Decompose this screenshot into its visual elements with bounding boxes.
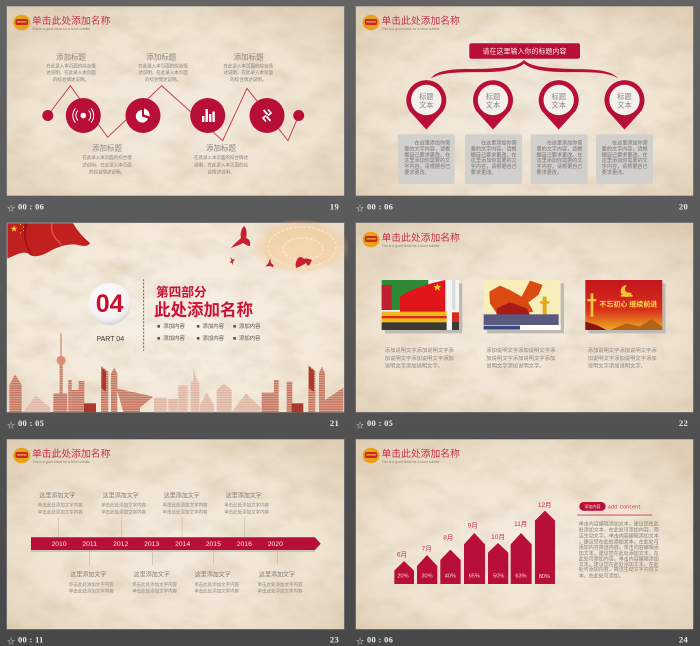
- card 1: 据自己要求更改。在: [404, 151, 450, 158]
- footer 21: 21: [330, 418, 339, 428]
- footer 20: 20: [679, 202, 688, 212]
- brace swoosh: [431, 60, 618, 78]
- paragraph: 单击内容编辑添加文本，建议您在此: [579, 521, 659, 528]
- timeline arrow: 2014: [175, 541, 190, 548]
- end dots: [42, 110, 304, 121]
- house bar chart: 50%: [493, 573, 504, 579]
- footer 20: ☆: [356, 204, 364, 213]
- paragraph: 处可添加内容，简洁生动文字内容文: [579, 566, 659, 573]
- header: 单击此处添加名称: [382, 14, 460, 27]
- caption 1: 加说明文字添加说明文字添加: [385, 354, 454, 362]
- icon: bars: [190, 98, 225, 133]
- label 8: 这里添加文字: [259, 570, 295, 578]
- caption 2: [486, 346, 556, 370]
- label 2: 这里添加文字: [103, 492, 139, 500]
- slide 22: three images: [356, 222, 694, 412]
- card 1: 要求更改。: [404, 169, 430, 176]
- timeline arrow: 2013: [144, 541, 159, 548]
- footer 19: 00 : 06: [18, 202, 44, 212]
- house bar chart: 65%: [469, 573, 480, 579]
- house bar chart: 8月: [443, 534, 453, 542]
- card 1: 在这里添加你需: [414, 140, 450, 146]
- footer 21: 00 : 05: [18, 418, 44, 428]
- header: 单击此处添加名称: [32, 447, 111, 460]
- card 2: [465, 134, 522, 184]
- pin 3: 标题: [552, 92, 566, 101]
- icon: pie: [126, 98, 160, 133]
- label 7: 单击此处添加文字内容: [194, 581, 240, 588]
- paper background: [7, 440, 344, 629]
- caption 3: 加说明文字添加说明文字添加: [588, 354, 657, 362]
- header: This is a good ideas for a short subtitle: [382, 460, 440, 464]
- card 3: [531, 134, 588, 184]
- pin 1: 标题: [419, 92, 433, 101]
- header: [362, 447, 460, 464]
- header: This is a good ideas for a short subtitle: [382, 244, 440, 248]
- icon: link: [250, 98, 284, 133]
- add content pill: Add Content: [608, 504, 641, 510]
- text block 5: 添加标题: [234, 52, 264, 62]
- image: map of china: [484, 280, 564, 333]
- card 2: 这里添加你需要的文: [471, 157, 517, 164]
- text block 3: 的综合情述说明。: [145, 76, 181, 83]
- text block 2: 在此录入本页面的综合情: [82, 154, 132, 161]
- card 3: 要求更改。: [536, 169, 562, 176]
- paragraph: 本，在此处可添加。: [579, 572, 624, 580]
- badge: 04: [88, 283, 131, 325]
- text block 2: 的综合情述说明。: [89, 168, 125, 175]
- label 3: [162, 492, 208, 515]
- label 2: 单击此处添加文字内容: [101, 508, 147, 515]
- bullet list: 添加内容: [202, 334, 225, 342]
- label 1: 单击此处添加文字内容: [38, 508, 83, 515]
- pin 3: 文本: [552, 101, 566, 110]
- paragraph: 文本，建议您在此处添加文本，在此: [579, 561, 659, 568]
- text block 4: 在此录入本页面的综合情述: [194, 154, 248, 161]
- paragraph: 添加内容简洁内容。单击内容编辑添: [579, 544, 659, 551]
- pin 4: 标题: [617, 92, 632, 101]
- text block 5: [224, 52, 274, 83]
- house bar chart: [394, 501, 555, 584]
- header: [13, 447, 111, 464]
- bullet list: [157, 322, 261, 342]
- header: [13, 14, 111, 31]
- pin 3: [539, 80, 579, 130]
- footer 22: 00 : 05: [367, 418, 393, 428]
- text block 2: 述说明，在此录入本页面: [82, 161, 132, 168]
- label 8: 单击此处添加文字内容: [258, 581, 303, 588]
- caption 1: 添加说明文字添加说明文字添: [385, 346, 454, 354]
- label 6: [132, 570, 178, 595]
- label 8: [258, 570, 303, 595]
- label 5: 单击此处添加文字内容: [69, 588, 114, 595]
- timeline arrow: 2015: [206, 541, 221, 548]
- card 3: 字内容，请根据自己: [536, 163, 582, 170]
- label 7: [194, 570, 240, 595]
- text block 3: 述说明，在此录入本页面: [138, 69, 188, 76]
- paragraph: 洁生动文字。单击内容编辑添加文本: [579, 532, 659, 540]
- part label: PART 04: [96, 336, 124, 343]
- label 4: 单击此处添加文字内容: [224, 502, 270, 509]
- bullet list: ■: [196, 336, 200, 342]
- add content pill: [579, 502, 641, 511]
- card 3: 据自己要求更改。在: [536, 151, 582, 158]
- footer 24: [356, 635, 688, 646]
- card 4: 字内容，请根据自己: [602, 163, 648, 170]
- house bar chart: 40%: [445, 573, 456, 579]
- footer 23: ☆: [7, 637, 15, 646]
- house bar chart: 10月: [491, 533, 505, 541]
- card 1: 这里添加你需要的文: [404, 157, 450, 164]
- section title: [154, 285, 254, 320]
- zigzag line: [48, 86, 299, 141]
- bullet list: 添加内容: [163, 334, 185, 342]
- label 7: 这里添加文字: [195, 570, 231, 578]
- label 1: 单击此处添加文字内容: [38, 502, 83, 509]
- label 2: [101, 492, 147, 515]
- paper background: [356, 440, 693, 629]
- image: party banner: [585, 280, 666, 333]
- header: [362, 231, 460, 248]
- caption 1: 说明文字添加说明文字。: [385, 362, 443, 370]
- caption 2: 加说明文字添加说明文字添加: [486, 354, 555, 362]
- bullet list: ■: [233, 336, 236, 342]
- header: 单击此处添加名称: [32, 14, 111, 27]
- header: This is a good ideas for a short subtitle: [32, 27, 90, 31]
- label 5: 这里添加文字: [70, 570, 106, 578]
- footer 21: ☆: [7, 421, 15, 430]
- text block 4: 添加标题: [206, 142, 236, 152]
- text block 4: [194, 142, 248, 175]
- dashed divider: [143, 279, 145, 351]
- text block 1: 的综合情述说明。: [53, 76, 89, 83]
- bullet list: ■: [157, 336, 160, 342]
- flag: [7, 223, 90, 258]
- pin 2: [473, 80, 513, 130]
- text block 1: 述说明，在此录入本页面: [46, 69, 96, 76]
- footer 24: 00 : 06: [367, 635, 393, 645]
- caption 2: 说明文字添加说明文字。: [486, 362, 545, 370]
- timeline arrow: 2011: [82, 541, 97, 548]
- label 3: 这里添加文字: [164, 492, 200, 500]
- card 4: 要的文字内容，请根: [602, 145, 648, 152]
- footer 24: 24: [679, 635, 688, 645]
- card 1: 要的文字内容，请根: [404, 145, 450, 152]
- paragraph: 加文本，建议您在此处添加文本，在: [579, 550, 659, 557]
- footer 20: [356, 202, 688, 213]
- pin 1: 文本: [419, 101, 433, 110]
- section title: 第四部分: [156, 285, 207, 300]
- text block 5: 述说明，在此录入本页面: [224, 69, 274, 76]
- footer 23: 00 : 11: [18, 635, 44, 645]
- paragraph: [579, 521, 659, 580]
- bullet list: ■: [233, 324, 236, 330]
- card 4: 据自己要求更改。在: [602, 151, 648, 158]
- footer 21: [7, 418, 339, 430]
- label 6: 单击此处添加文字内容: [132, 588, 178, 595]
- slide 19: zigzag process: [6, 6, 344, 196]
- footer 22: ☆: [356, 421, 364, 430]
- card 4: 在这里添加你需: [612, 140, 648, 146]
- timeline arrow: 2012: [113, 541, 128, 548]
- label 2: 单击此处添加文字内容: [101, 502, 147, 509]
- text block 2: [82, 142, 132, 175]
- header: [362, 14, 460, 31]
- footer 20: 00 : 06: [367, 202, 393, 212]
- caption 3: 说明文字添加说明文字。: [588, 362, 646, 370]
- card 1: [398, 134, 455, 184]
- card 3: 这里添加你需要的文: [536, 157, 582, 164]
- label 4: 单击此处添加文字内容: [224, 508, 270, 515]
- footer 19: [7, 202, 339, 213]
- bullet list: ■: [157, 324, 160, 330]
- house bar chart: 20%: [397, 573, 409, 579]
- timeline arrow: 2020: [268, 541, 283, 548]
- text block 3: [138, 52, 188, 83]
- label 3: 单击此处添加文字内容: [162, 502, 208, 509]
- house bar chart: 11月: [514, 520, 527, 528]
- house bar chart: 6月: [397, 550, 407, 558]
- caption 2: 添加说明文字添加说明文字添: [486, 346, 556, 354]
- paper background: [356, 223, 693, 412]
- text block 1: 在此录入本页面的综合情: [46, 62, 96, 70]
- label 4: [224, 492, 270, 515]
- bullet list: 添加内容: [239, 322, 261, 330]
- bullet list: ■: [196, 324, 200, 330]
- footer 19: ☆: [7, 204, 15, 213]
- text block 1: [46, 52, 96, 83]
- slide 21: section cover: [6, 219, 350, 412]
- card 2: 要求更改。: [471, 169, 496, 176]
- caption 1: [385, 346, 454, 370]
- card 1: 字内容，请根据自己: [404, 163, 450, 170]
- caption 3: [588, 346, 657, 370]
- label 7: 单击此处添加文字内容: [194, 588, 240, 595]
- house bar chart: 63%: [515, 573, 527, 579]
- pin 2: 文本: [486, 101, 500, 110]
- label 6: 单击此处添加文字内容: [132, 581, 178, 588]
- title bar: [469, 43, 580, 59]
- pin 4: 文本: [617, 101, 632, 110]
- label 1: [38, 492, 83, 515]
- text block 5: 在此录入本页面的综合情: [224, 62, 274, 70]
- paper background: [356, 6, 693, 196]
- add content pill: 添加内容: [584, 503, 600, 509]
- text block 3: 在此录入本页面的综合情: [138, 62, 188, 70]
- icon: signal: [66, 98, 101, 133]
- pin 1: [406, 80, 446, 130]
- header: 单击此处添加名称: [382, 447, 460, 460]
- card 4: 这里添加你需要的文: [602, 157, 648, 164]
- caption 3: 添加说明文字添加说明文字添: [588, 346, 657, 354]
- label 4: 这里添加文字: [226, 492, 262, 500]
- slide 24: bar chart: [356, 439, 694, 630]
- footer 23: [7, 635, 339, 646]
- text block 4: 说明，在此录入本页面的综: [194, 161, 248, 168]
- footer 22: [356, 418, 688, 430]
- slide 20: pins: [356, 6, 694, 196]
- text block 2: 添加标题: [92, 142, 122, 152]
- accent rule: [577, 514, 652, 516]
- card 2: 据自己要求更改。在: [471, 151, 517, 158]
- bullet list: 添加内容: [239, 334, 261, 342]
- timeline arrow: 2016: [237, 541, 252, 548]
- text block 3: 添加标题: [146, 52, 177, 62]
- header: This is a good ideas for a short subtitle: [382, 27, 440, 31]
- pin 2: 标题: [486, 92, 500, 101]
- card 3: 在这里添加你需: [547, 140, 582, 146]
- label 8: 单击此处添加文字内容: [258, 588, 303, 595]
- label 5: 单击此处添加文字内容: [69, 581, 114, 588]
- text block 1: 添加标题: [56, 52, 86, 62]
- bullet list: 添加内容: [163, 322, 185, 330]
- house bar chart: 80%: [539, 574, 550, 580]
- section title: 此处添加名称: [154, 301, 254, 320]
- label 1: 这里添加文字: [39, 492, 75, 500]
- header: 单击此处添加名称: [382, 231, 460, 244]
- paragraph: 处添加文本，在此处可添加内容，简: [579, 527, 659, 534]
- skyline: [9, 333, 343, 412]
- image: party banner: 不忘初心 继续前进: [599, 299, 657, 308]
- card 4: [596, 134, 653, 184]
- footer 19: 19: [330, 202, 339, 212]
- card 2: 要的文字内容，请根: [471, 145, 517, 152]
- swirl decoration: [250, 219, 350, 275]
- paragraph: ，建议您在此处添加文本，在此处可: [579, 538, 659, 545]
- timeline arrow: [31, 537, 321, 552]
- label 6: 这里添加文字: [134, 570, 170, 578]
- paper background: [7, 6, 344, 196]
- card 3: 要的文字内容，请根: [536, 145, 582, 152]
- text block 5: 的综合情述说明。: [230, 76, 266, 83]
- image: flag parade: [382, 280, 462, 333]
- footer 22: 22: [679, 418, 688, 428]
- house bar chart: 30%: [421, 573, 433, 579]
- house bar chart: 12月: [538, 501, 552, 509]
- timeline arrow: 2010: [51, 541, 67, 548]
- house bar chart: 7月: [422, 544, 432, 552]
- connectors: [58, 517, 277, 566]
- slide 23: timeline: [6, 439, 344, 630]
- bullet list: 添加内容: [202, 322, 225, 330]
- paragraph: 此处可添加内容。单击内容编辑添加: [579, 556, 659, 563]
- label 3: 单击此处添加文字内容: [162, 508, 208, 515]
- footer 24: ☆: [356, 637, 364, 646]
- footer 23: 23: [330, 635, 339, 645]
- card 2: 在这里添加你需: [481, 140, 517, 146]
- birds: [230, 226, 312, 268]
- house bar chart: 9月: [468, 522, 478, 530]
- paper background: [7, 223, 344, 412]
- card 4: 要求更改。: [602, 169, 627, 176]
- label 5: [69, 570, 114, 595]
- card 2: 字内容，请根据自己: [471, 163, 517, 170]
- pin 4: [604, 80, 644, 130]
- title bar: 请在这里输入你的标题内容: [482, 47, 566, 56]
- header: This is a good ideas for a short subtitle: [32, 460, 90, 464]
- text block 4: 合情述说明。: [208, 168, 234, 175]
- badge: 04: 04: [96, 290, 124, 318]
